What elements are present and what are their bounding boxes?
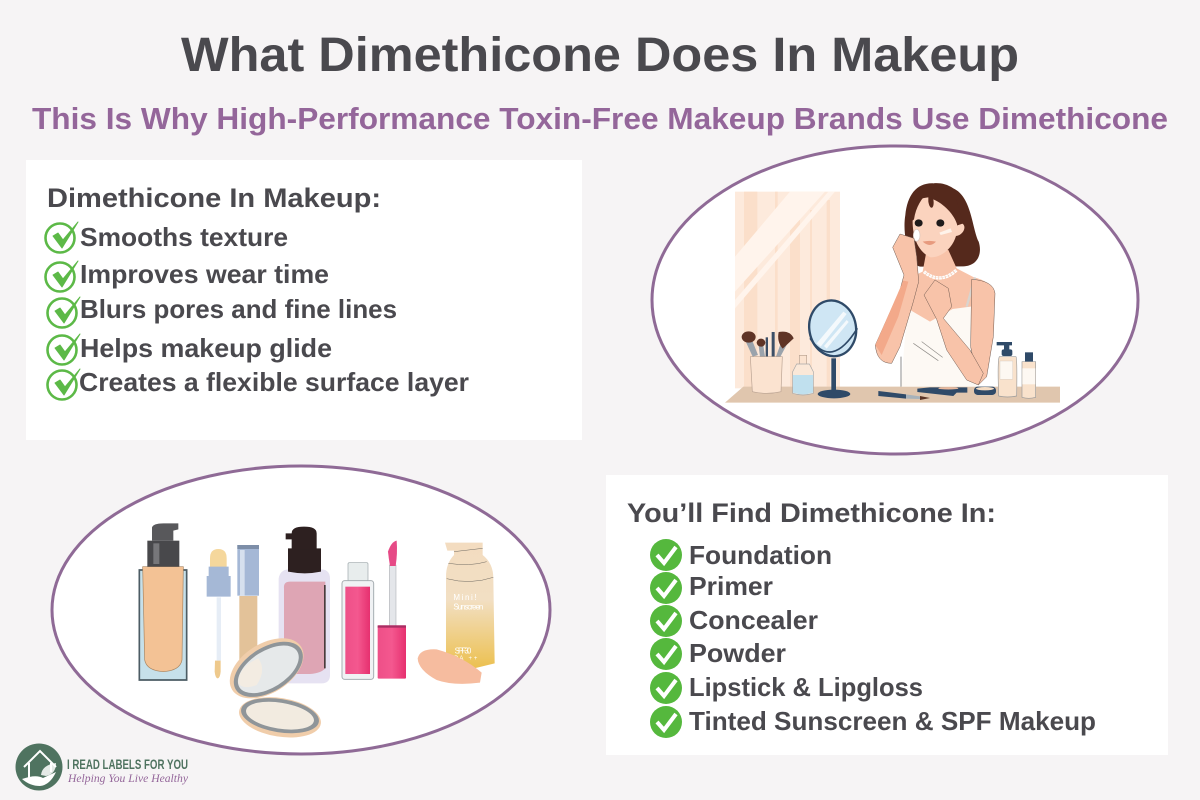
compact mirror bbox=[219, 626, 324, 743]
subtitle: This Is Why High-Performance Toxin-Free Makeup Brands Use Dimethicone bbox=[32, 101, 1168, 136]
viewer left arm and hand bbox=[875, 234, 919, 363]
list item: lipstick and lipgloss: Lipstick & Lipgloss bbox=[689, 672, 923, 702]
brush cup bbox=[742, 331, 794, 393]
viewer right upper arm bbox=[971, 279, 995, 385]
sunscreen tube: Sunscreen bbox=[453, 602, 483, 611]
standing mirror bbox=[805, 297, 861, 398]
panel: makeup products illustration bbox=[52, 466, 550, 754]
logo bbox=[16, 744, 189, 790]
sunscreen tube: Mini! bbox=[453, 593, 477, 602]
list item: powder: Powder bbox=[689, 638, 786, 668]
face bbox=[913, 197, 964, 257]
list item: improves wear time: Improves wear time bbox=[80, 259, 329, 289]
heading: you'll find dimethicone in: You’ll Find Dimethicone In: bbox=[627, 498, 996, 528]
hair bbox=[904, 183, 980, 267]
sunscreen tube bbox=[418, 543, 495, 684]
curtain bbox=[735, 192, 840, 388]
list item: primer bbox=[650, 571, 773, 604]
dropper bbox=[207, 549, 231, 678]
list item: creates a flexible surface layer: Creates a flexible surface layer bbox=[79, 367, 469, 397]
heading: dimethicone in makeup: Dimethicone In Makeup: bbox=[47, 183, 381, 213]
fringe bbox=[908, 187, 963, 225]
neck and chest bbox=[897, 250, 995, 322]
viewer right forearm and hand bbox=[924, 280, 983, 385]
list item: powder bbox=[650, 638, 786, 670]
concealer tube bbox=[237, 545, 259, 669]
panel: dimethicone in makeup bbox=[26, 160, 582, 440]
pump bottle with pink product bbox=[279, 527, 330, 683]
logo: Helping You Live Healthy bbox=[67, 771, 189, 785]
lip gloss wand bbox=[378, 541, 406, 679]
lip gloss tube bbox=[342, 563, 374, 679]
pump bottle bbox=[997, 342, 1017, 397]
list item: tinted sunscreen and spf makeup: Tinted Sunscreen & SPF Makeup bbox=[689, 706, 1096, 736]
panel: illustration of woman applying makeup bbox=[652, 146, 1138, 454]
foundation bottle bbox=[139, 523, 187, 680]
logo: I READ LABELS FOR YOU bbox=[67, 756, 188, 772]
title: What Dimethicone Does In Makeup bbox=[181, 29, 1019, 82]
list item: helps makeup glide: Helps makeup glide bbox=[80, 333, 332, 363]
palette bbox=[917, 387, 967, 396]
woman bbox=[875, 183, 995, 387]
compact powder bbox=[974, 387, 996, 395]
makeup brush on table bbox=[878, 391, 930, 400]
dress bbox=[901, 307, 977, 387]
list item: foundation: Foundation bbox=[689, 540, 832, 570]
perfume bottle bbox=[793, 355, 813, 395]
sunscreen tube: SPF 30 bbox=[455, 646, 472, 655]
list item: blurs pores and fine lines: Blurs pores and fine lines bbox=[80, 294, 397, 324]
list item: primer: Primer bbox=[689, 571, 773, 601]
list item: smooths texture: Smooths texture bbox=[80, 222, 288, 252]
small bottle bbox=[1022, 352, 1036, 398]
panel: you'll find dimethicone in bbox=[606, 475, 1168, 755]
vanity table bbox=[725, 387, 1060, 403]
list item: concealer: Concealer bbox=[689, 605, 818, 635]
sunscreen tube: PA ++ bbox=[454, 656, 478, 662]
